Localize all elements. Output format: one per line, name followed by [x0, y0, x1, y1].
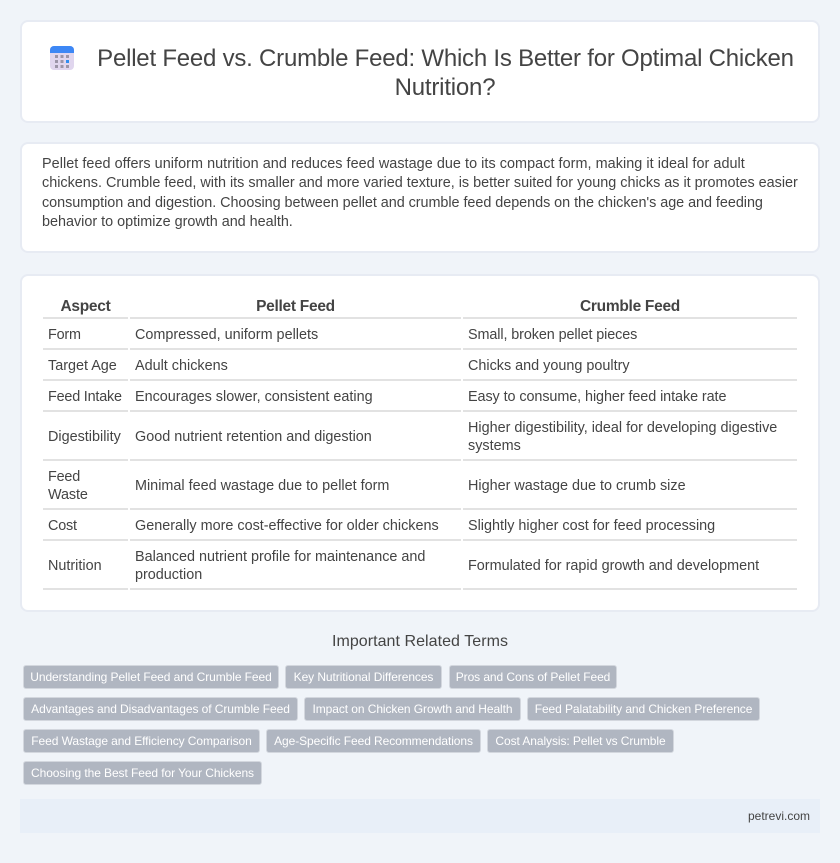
tag [266, 729, 481, 753]
row: cost [48, 518, 715, 534]
tag [527, 697, 760, 721]
text block: introduction: behavior to optimize growth and health. [42, 214, 293, 230]
row: target age [48, 358, 630, 374]
row: target age: Adult chickens [135, 358, 228, 374]
text block: introduction [42, 156, 798, 230]
tag: Understanding Pellet Feed and Crumble Feed [30, 670, 272, 684]
tag: Key Nutritional Differences [294, 670, 433, 684]
tag: Age-Specific Feed Recommendations [274, 734, 473, 748]
tag [23, 761, 262, 785]
footer source: petrevi.com [748, 809, 810, 823]
tag: Feed Palatability and Chicken Preference [535, 702, 752, 716]
footer [20, 799, 820, 833]
row: digestibility: Higher digestibility, ideal for developing digestive [468, 420, 777, 436]
text block: introduction: Pellet feed offers uniform nutrition and reduces feed wastage due to its compact form, making it ideal for adult [42, 156, 745, 172]
row: nutrition [48, 549, 760, 583]
row: target age: Target Age [48, 358, 117, 374]
comparison table [43, 298, 797, 590]
row: digestibility: Good nutrient retention and digestion [135, 429, 372, 445]
tag [487, 729, 674, 753]
row: feed waste: Feed [48, 469, 80, 485]
text block: introduction: consumption and digestion. Choosing between pellet and crumble feed depends on the chicken's age and feeding [42, 195, 763, 211]
panel: introduction [20, 142, 820, 253]
row: feed waste: Higher wastage due to crumb size [468, 478, 686, 494]
icon: calendar [50, 46, 74, 70]
related term tags [23, 665, 760, 785]
tag [449, 665, 617, 689]
tag [23, 665, 279, 689]
row: feed waste: Waste [48, 487, 88, 503]
row: digestibility: systems [468, 438, 521, 454]
row: form: Small, broken pellet pieces [468, 327, 637, 343]
row: nutrition: Nutrition [48, 558, 102, 574]
row: digestibility: Digestibility [48, 429, 121, 445]
table header: Crumble Feed [580, 298, 680, 315]
tag: Choosing the Best Feed for Your Chickens [31, 766, 254, 780]
row: nutrition: Balanced nutrient profile for maintenance and [135, 549, 425, 565]
tag: Cost Analysis: Pellet vs Crumble [495, 734, 666, 748]
row: cost: Slightly higher cost for feed processing [468, 518, 715, 534]
row: feed waste: Minimal feed wastage due to pellet form [135, 478, 389, 494]
tag [285, 665, 442, 689]
row: feed intake: Feed Intake [48, 389, 122, 405]
tag: Feed Wastage and Efficiency Comparison [31, 734, 252, 748]
row: nutrition: production [135, 567, 202, 583]
title: Pellet Feed vs. Crumble Feed: Which Is Better for Optimal Chicken [97, 45, 794, 72]
row: form: Compressed, uniform pellets [135, 327, 318, 343]
table header: Pellet Feed [256, 298, 335, 315]
tag: Pros and Cons of Pellet Feed [456, 670, 610, 684]
tag [23, 697, 298, 721]
row: feed waste [48, 469, 686, 503]
tag: Impact on Chicken Growth and Health [312, 702, 512, 716]
row: target age: Chicks and young poultry [468, 358, 630, 374]
row: form: Form [48, 327, 81, 343]
row: feed intake: Easy to consume, higher feed intake rate [468, 389, 726, 405]
text block: introduction: chickens. Crumble feed, with its smaller and more varied texture, is better suited for young chicks as it promotes easier [42, 175, 798, 191]
table header [60, 298, 680, 315]
heading: important related terms: Important Related Terms [332, 633, 508, 650]
panel: comparison table [20, 274, 820, 612]
row: form [48, 327, 637, 343]
title [97, 45, 794, 101]
tag [23, 729, 260, 753]
panel: title header [20, 20, 820, 123]
table header: Aspect [60, 298, 110, 315]
row: feed intake [48, 389, 726, 405]
row: cost: Cost [48, 518, 77, 534]
title: Nutrition? [395, 74, 495, 101]
row: cost: Generally more cost-effective for older chickens [135, 518, 439, 534]
row: nutrition: Formulated for rapid growth and development [468, 558, 759, 574]
row: digestibility [48, 420, 777, 454]
row: feed intake: Encourages slower, consistent eating [135, 389, 373, 405]
tag [304, 697, 521, 721]
tag: Advantages and Disadvantages of Crumble Feed [31, 702, 290, 716]
